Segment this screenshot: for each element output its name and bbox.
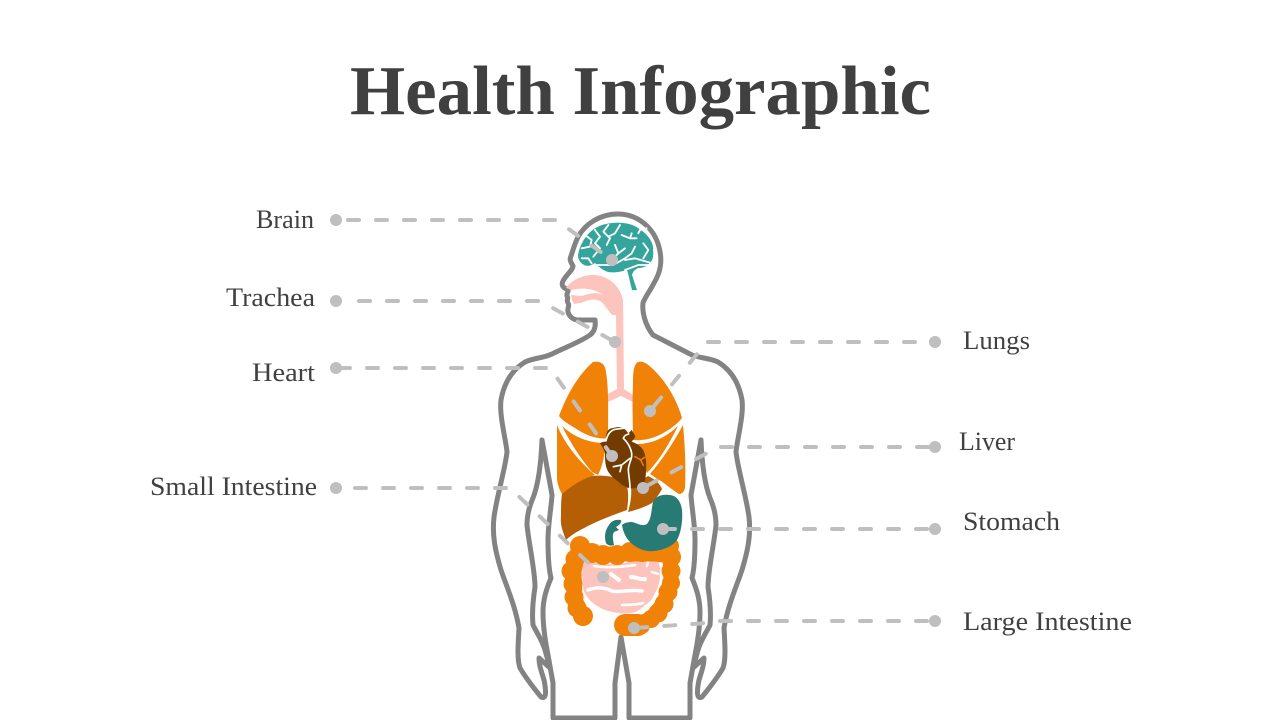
connector: lungs (644, 336, 941, 417)
trachea (566, 275, 633, 402)
connector: large intestine (628, 615, 941, 634)
connector: liver (637, 441, 941, 494)
stomach (605, 495, 682, 551)
small intestine (582, 555, 660, 613)
label: Large Intestine: Large Intestine (963, 607, 1132, 636)
liver (561, 476, 662, 540)
body outline (493, 214, 750, 718)
label: Trachea: Trachea (226, 283, 315, 312)
title: Health Infographic (350, 53, 931, 130)
connector: small intestine (330, 482, 609, 583)
connector: heart (330, 362, 618, 462)
left lung (557, 362, 608, 494)
human body diagram (493, 214, 750, 718)
large intestine (562, 536, 681, 634)
label: Lungs: Lungs (963, 326, 1030, 355)
label: Brain: Brain (256, 205, 314, 234)
heart (600, 427, 646, 488)
brain (578, 223, 653, 290)
label: Stomach: Stomach (963, 507, 1060, 536)
right lung (633, 362, 685, 494)
label: Small Intestine: Small Intestine (150, 472, 317, 501)
connector: trachea (330, 295, 621, 348)
connector: stomach (657, 523, 941, 535)
label: Liver: Liver (959, 427, 1015, 456)
connector: brain (330, 214, 618, 266)
label: Heart: Heart (252, 358, 316, 387)
